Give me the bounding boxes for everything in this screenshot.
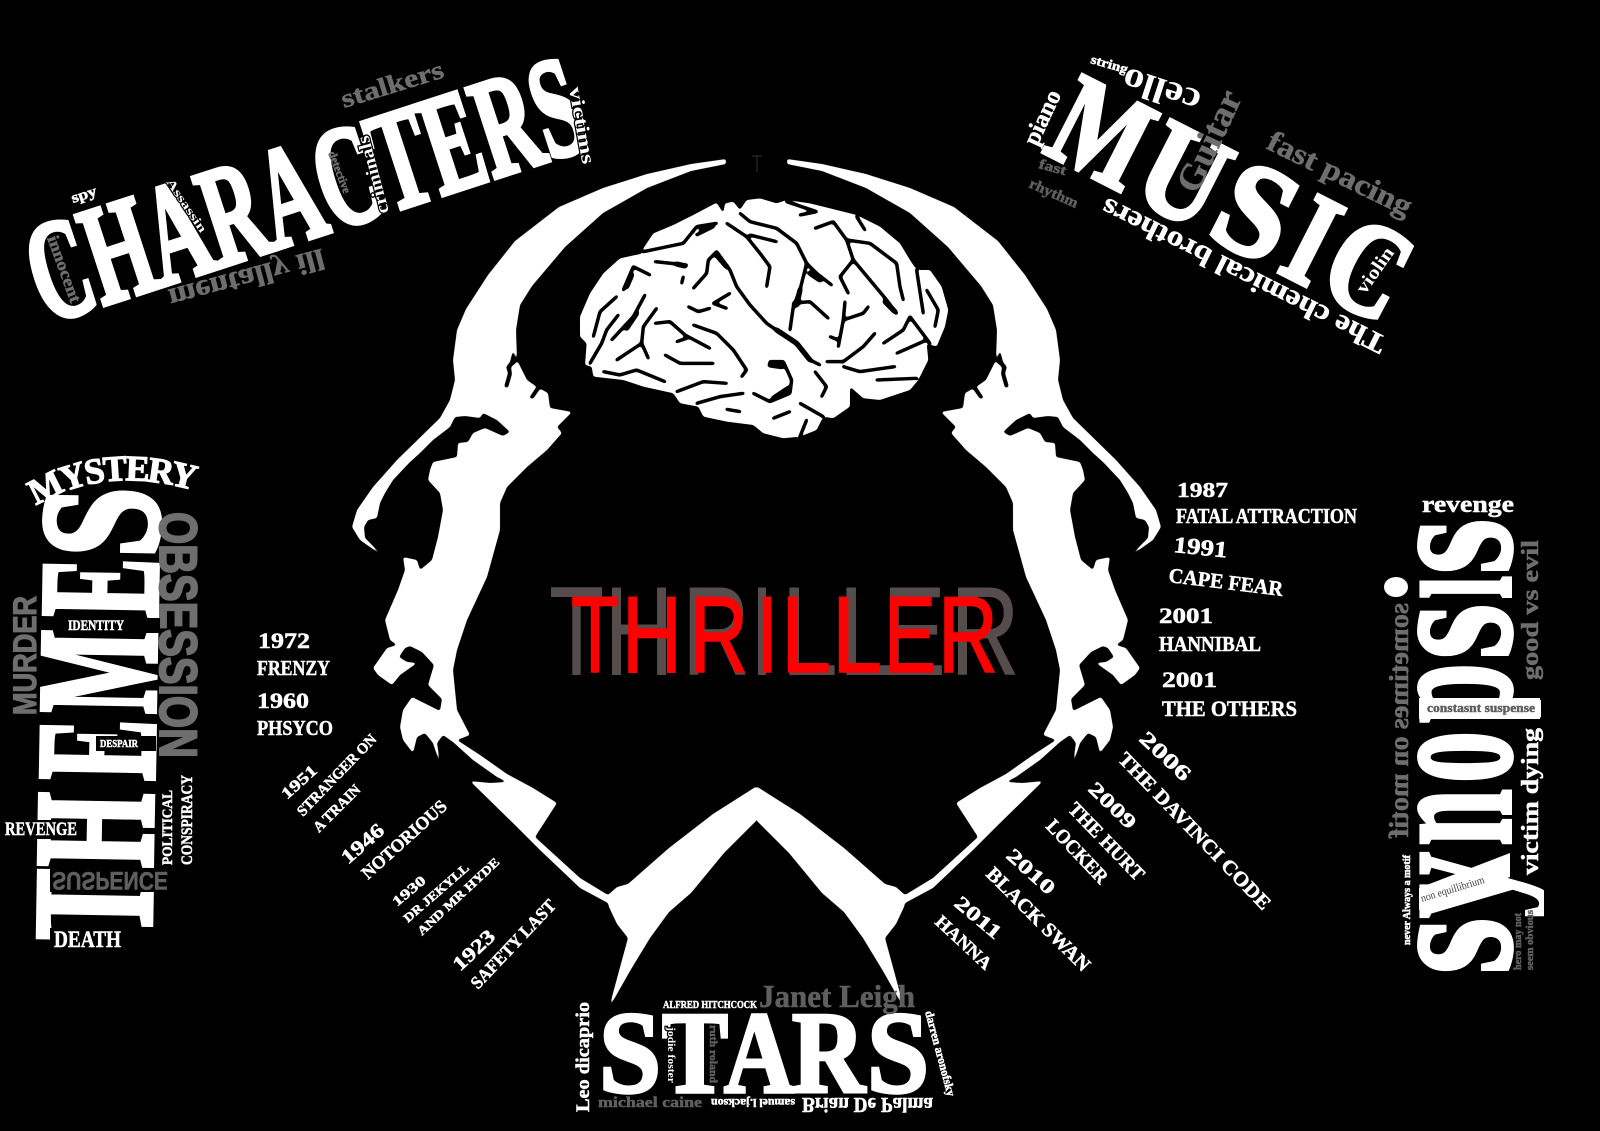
heading: THEMES: T [0,868,188,942]
title shadow: H [604,560,674,702]
heading: synopsis: s [1338,519,1552,574]
word: michael caine: michael caine [598,1095,702,1111]
heading: STARS [599,989,929,1118]
film: 1960 psycho [257,688,333,740]
word: samuel l jackson: samuel l.jackson [711,1096,795,1110]
film: 2001 hannibal: HANNIBAL [1159,632,1261,656]
film: 1987 fatal attraction: 1987 [1177,478,1228,502]
heading: THEMES: E [2,717,191,782]
heading: synopsis [1338,519,1552,974]
word: fast: fast [1037,157,1068,179]
word: mentally ill: mentally ill [165,242,328,315]
title shadow: L [781,560,838,702]
film: 2009 the hurt locker [1041,778,1149,889]
film: 1923 safety last: SAFETY LAST [466,895,560,993]
film: 1972 frenzy: 1972 [258,628,310,653]
panel: characters word cloud [7,26,602,353]
word: mystery: MYSTERY [24,456,200,506]
word: darren aronofsky: darren aronofsky [922,1009,958,1098]
word: stalkers: stalkers [337,55,447,114]
word: brian de palma: Brian De Palma [802,1093,933,1117]
panel: themes word cloud [0,456,207,952]
film: 2006 the da vinci code: THE DAVINCI CODE [1113,748,1275,915]
heading: MUSIC [1028,46,1436,351]
title red: L [781,574,831,696]
heading: MUSIC: S [1191,129,1322,293]
film: 1930 dr jekyll: DR JEKYLL [401,861,472,925]
film: 2011 hanna [931,892,1006,974]
label: non equilibrium: non equillibrium [1419,874,1486,905]
title red: L [832,574,882,696]
word: ruth roland: ruth roland [707,1025,719,1083]
film: 2001 the others [1162,667,1297,721]
heading: STARS: R [792,989,866,1118]
icon: brain [580,198,948,438]
heading: THEMES: E [5,556,194,619]
film: 2011 hanna: HANNA [931,911,996,974]
film: 1991 cape fear: 1991 [1172,532,1229,563]
film: 1951 strangers on a train: STRANGER ON [294,732,380,820]
panel: music word cloud [1019,46,1436,359]
heading: STARS: A [724,989,794,1118]
word: suspence: SUSPENCE [52,866,168,894]
title shadow [549,560,1020,702]
title red [571,574,998,696]
word: conspiracy: CONSPIRACY [179,775,196,865]
film: 1930 dr jekyll [390,855,502,938]
word: strings: string [1089,51,1130,77]
title red: R [938,574,998,696]
word: criminals: criminals [353,134,393,216]
film: 1960 psycho: 1960 [257,688,309,713]
word: janet leigh: Janet Leigh [759,978,915,1014]
word: detective: detective [325,149,354,196]
film: 1951 strangers on a train [278,732,380,836]
film: 2009 the hurt locker: 2009 [1084,778,1141,834]
film: 2009 the hurt locker: THE HURT [1063,798,1149,886]
heading: STARS: S [599,989,661,1118]
word: sometimes on motif: sometimes on motif [1384,603,1414,839]
film: 1991 cape fear [1167,532,1285,601]
film: 1972 frenzy: FRENZY [257,656,330,680]
heading: synopsis: s [1338,604,1552,659]
panel: synopsis word cloud [1338,492,1566,974]
word: never always a motif: never Always a motif [1402,854,1413,945]
word: revenge: revenge [1422,492,1514,518]
film: 2001 hannibal: 2001 [1159,603,1213,628]
film: 2010 black swan: BLACK SWAN [981,863,1095,977]
heading: MUSIC: I [1262,165,1363,314]
film: 1951 strangers on a train: 1951 [278,762,321,803]
word: cello: cello [1117,60,1205,122]
title red: T [571,574,619,696]
film: 1930 dr jekyll: AND MR HYDE [414,855,502,938]
word: alfred hitchcock: ALFRED HITCHCOCK [663,999,757,1011]
word: victim dying: victim dying [1518,728,1544,875]
label: constant suspense [1419,698,1540,719]
title red: R [690,574,748,696]
heading: MUSIC: C [1302,185,1436,351]
film: 1946 notorious: 1946 [337,819,389,869]
label: non equilibrium [1419,853,1510,910]
word: rhythm: rhythm [1026,176,1081,212]
panel: stars word cloud [573,978,958,1118]
word: despair: DESPAIR [100,738,139,750]
timeline: earlier films [257,628,560,993]
word: leo dicaprio: Leo dicaprio [573,1002,594,1112]
heading: MUSIC: M [1028,46,1177,219]
heading: synopsis: y [1338,852,1552,918]
word: guitar: Guitar [1168,84,1250,198]
title shadow: L [838,560,895,702]
film: 1987 fatal attraction: FATAL ATTRACTION [1176,504,1357,528]
panel: twin head silhouette [352,159,1161,1008]
word: jodie foster: jodie foster [665,1026,677,1083]
word: good vs evil: good vs evil [1518,540,1544,680]
label: constant suspense: constasnt suspense [1427,700,1535,715]
film: 1987 fatal attraction [1176,478,1357,528]
film: 2006 the da vinci code: 2006 [1135,726,1196,786]
word: obsession: OBSESSION [148,512,207,758]
word: piano: piano [1019,86,1067,150]
word: victims: victims [564,85,598,166]
heading: synopsis: o [1338,731,1552,783]
heading: THEMES: M [3,628,192,715]
title red: E [884,574,936,696]
word: political: POLITICAL [160,790,176,865]
film: 1923 safety last: 1923 [448,925,500,976]
heading: THEMES [0,485,195,942]
title shadow: R [682,560,750,702]
title shadow: E [882,560,946,702]
title shadow: T [549,560,604,702]
film: 2011 hanna: 2011 [950,892,1006,944]
heading: STARS: S [867,989,929,1118]
word: the chemical brothers: The chemical brothers [1096,191,1391,359]
word: murder: MURDER [7,596,43,715]
film: 1991 cape fear: CAPE FEAR [1167,563,1285,601]
heading: synopsis: n [1338,789,1552,846]
heading: THEMES: S [6,485,195,559]
heading: synopsis: s [1338,918,1552,974]
word: spy: spy [69,183,100,207]
title red: H [622,574,682,696]
word: fast pacing: fast pacing [1262,125,1418,223]
word: assassin: Assassin [164,176,210,235]
film: 2001 the others: THE OTHERS [1162,696,1297,721]
word: identity: IDENTITY [68,618,124,634]
film: 1946 notorious: NOTORIOUS [357,796,451,883]
word: revenge: REVENGE [5,819,77,840]
word: innocent: innocent [43,233,85,305]
heading: STARS: T [662,989,728,1118]
word: despair [96,736,156,751]
word: death: DEATH [54,927,121,952]
film: 1960 psycho: PHSYCO [257,716,333,740]
title shadow: I [750,560,774,702]
film: 1951 strangers on a train: A TRAIN [311,782,364,836]
film: 2001 the others: 2001 [1162,667,1217,692]
film: 2001 hannibal [1159,603,1261,656]
word: hero may not: hero may not [1513,912,1524,970]
title: THRILLER [549,560,1020,702]
word: violin: violin [1352,243,1399,298]
film: 2010 black swan: 2010 [1002,844,1059,900]
title red: I [756,574,778,696]
heading: MUSIC: U [1115,90,1253,258]
film: 2009 the hurt locker: LOCKER [1041,815,1113,889]
film: 1930 dr jekyll: 1930 [390,874,429,910]
heading: THEMES: H [0,791,189,869]
head facing right [756,159,1161,1008]
timeline: later films [931,478,1357,977]
heading: synopsis: p [1338,663,1552,723]
heading: synopsis: i [1338,576,1552,599]
word: seem obvious: seem obvious [1525,910,1536,970]
title shadow: R [950,560,1020,702]
film: 1972 frenzy [257,628,330,680]
head facing left [352,159,757,1008]
